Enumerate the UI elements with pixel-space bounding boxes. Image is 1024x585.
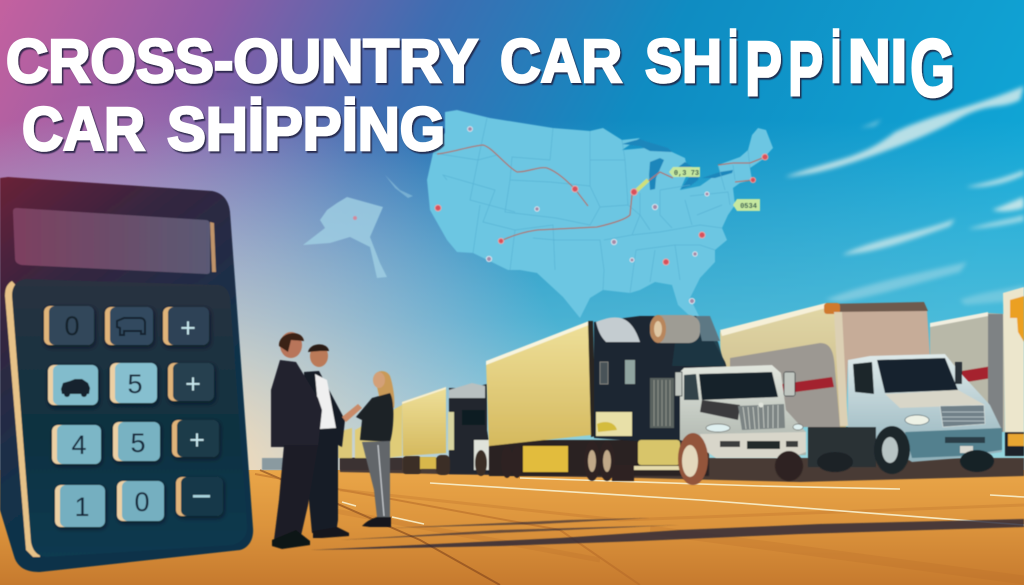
distant truck wheels (403, 450, 487, 476)
map: cost label two (733, 199, 760, 211)
main truck chassis (489, 440, 709, 476)
main truck grille (738, 402, 785, 430)
title: SH (645, 27, 722, 95)
key: 5 (110, 363, 157, 403)
key: plus two (168, 363, 214, 401)
main truck cab and hood (680, 365, 806, 458)
key: dark car icon (105, 307, 153, 345)
title: SHİPPİNG (167, 95, 445, 163)
title: CROSS-OUNTRY (6, 27, 478, 95)
distant trucks convoy (262, 383, 492, 476)
map: contiguous states (427, 110, 773, 318)
key: minus (176, 477, 223, 516)
key: 0: 0 (64, 311, 80, 341)
person: man in centre (304, 344, 362, 538)
title: İ (728, 27, 738, 95)
map: cost label one: 0,3 73 (674, 170, 699, 178)
box truck cab (848, 354, 1002, 462)
key: 1 (55, 485, 105, 527)
distant truck trailer (402, 387, 446, 456)
title: P (745, 26, 782, 112)
key: plus one (163, 307, 209, 345)
distant truck cab (448, 383, 492, 474)
box truck (720, 302, 1002, 474)
main truck trailer (486, 321, 596, 472)
box truck chassis (808, 427, 876, 467)
map: state lines (433, 118, 750, 293)
key: 0 second (117, 481, 164, 521)
title: NI (848, 27, 907, 95)
title: P (788, 26, 823, 112)
main truck roof tank (650, 315, 700, 343)
key: plus two: + (185, 369, 201, 399)
key: 0 (44, 306, 94, 345)
main truck engine and fuel tank (625, 378, 685, 470)
main truck wheels (501, 433, 803, 485)
map: Alaska and islands (303, 175, 413, 278)
key: plus three (172, 420, 219, 457)
key: light car icon (48, 365, 98, 405)
key: 5 second: 5 (130, 428, 146, 458)
key: plus one: + (180, 313, 196, 343)
main truck mirrors (675, 372, 795, 396)
person: man in front (271, 332, 322, 549)
key: 0 second: 0 (134, 487, 150, 517)
title: CAR (500, 27, 622, 95)
map: great lakes (622, 139, 733, 190)
key: 1: 1 (74, 492, 90, 522)
calculator body (0, 177, 253, 572)
title: İ (831, 27, 841, 95)
background truck grey (930, 312, 1005, 432)
key: plus three: + (189, 425, 205, 455)
box truck wheels (817, 426, 994, 474)
title (6, 23, 955, 163)
title: G (910, 23, 955, 114)
map: cost label one (669, 167, 700, 178)
map: cost label two: 0534 (740, 203, 757, 211)
business people group (271, 332, 394, 549)
key: 4: 4 (71, 430, 87, 460)
person: woman (356, 371, 394, 527)
long shadows on road (310, 518, 1024, 550)
key: 4 (52, 425, 101, 464)
map: location pins (353, 127, 768, 304)
main truck sleeper cab (594, 316, 730, 445)
map: routes (437, 145, 765, 241)
clouds (785, 86, 1024, 305)
box truck cargo body (720, 302, 930, 427)
calculator (0, 177, 253, 572)
background truck orange and white (1003, 287, 1024, 456)
title: CAR (22, 95, 145, 163)
calculator display (13, 208, 210, 274)
calculator keypad (5, 279, 247, 557)
ground: asphalt road (0, 458, 1024, 585)
main semi truck (486, 315, 806, 485)
map: United States with routes (303, 110, 773, 318)
main truck bumper (700, 432, 806, 458)
road lane lines (342, 478, 1024, 525)
key: 5 second (113, 422, 160, 461)
key: 5: 5 (127, 369, 143, 399)
main truck headlights (706, 424, 803, 432)
